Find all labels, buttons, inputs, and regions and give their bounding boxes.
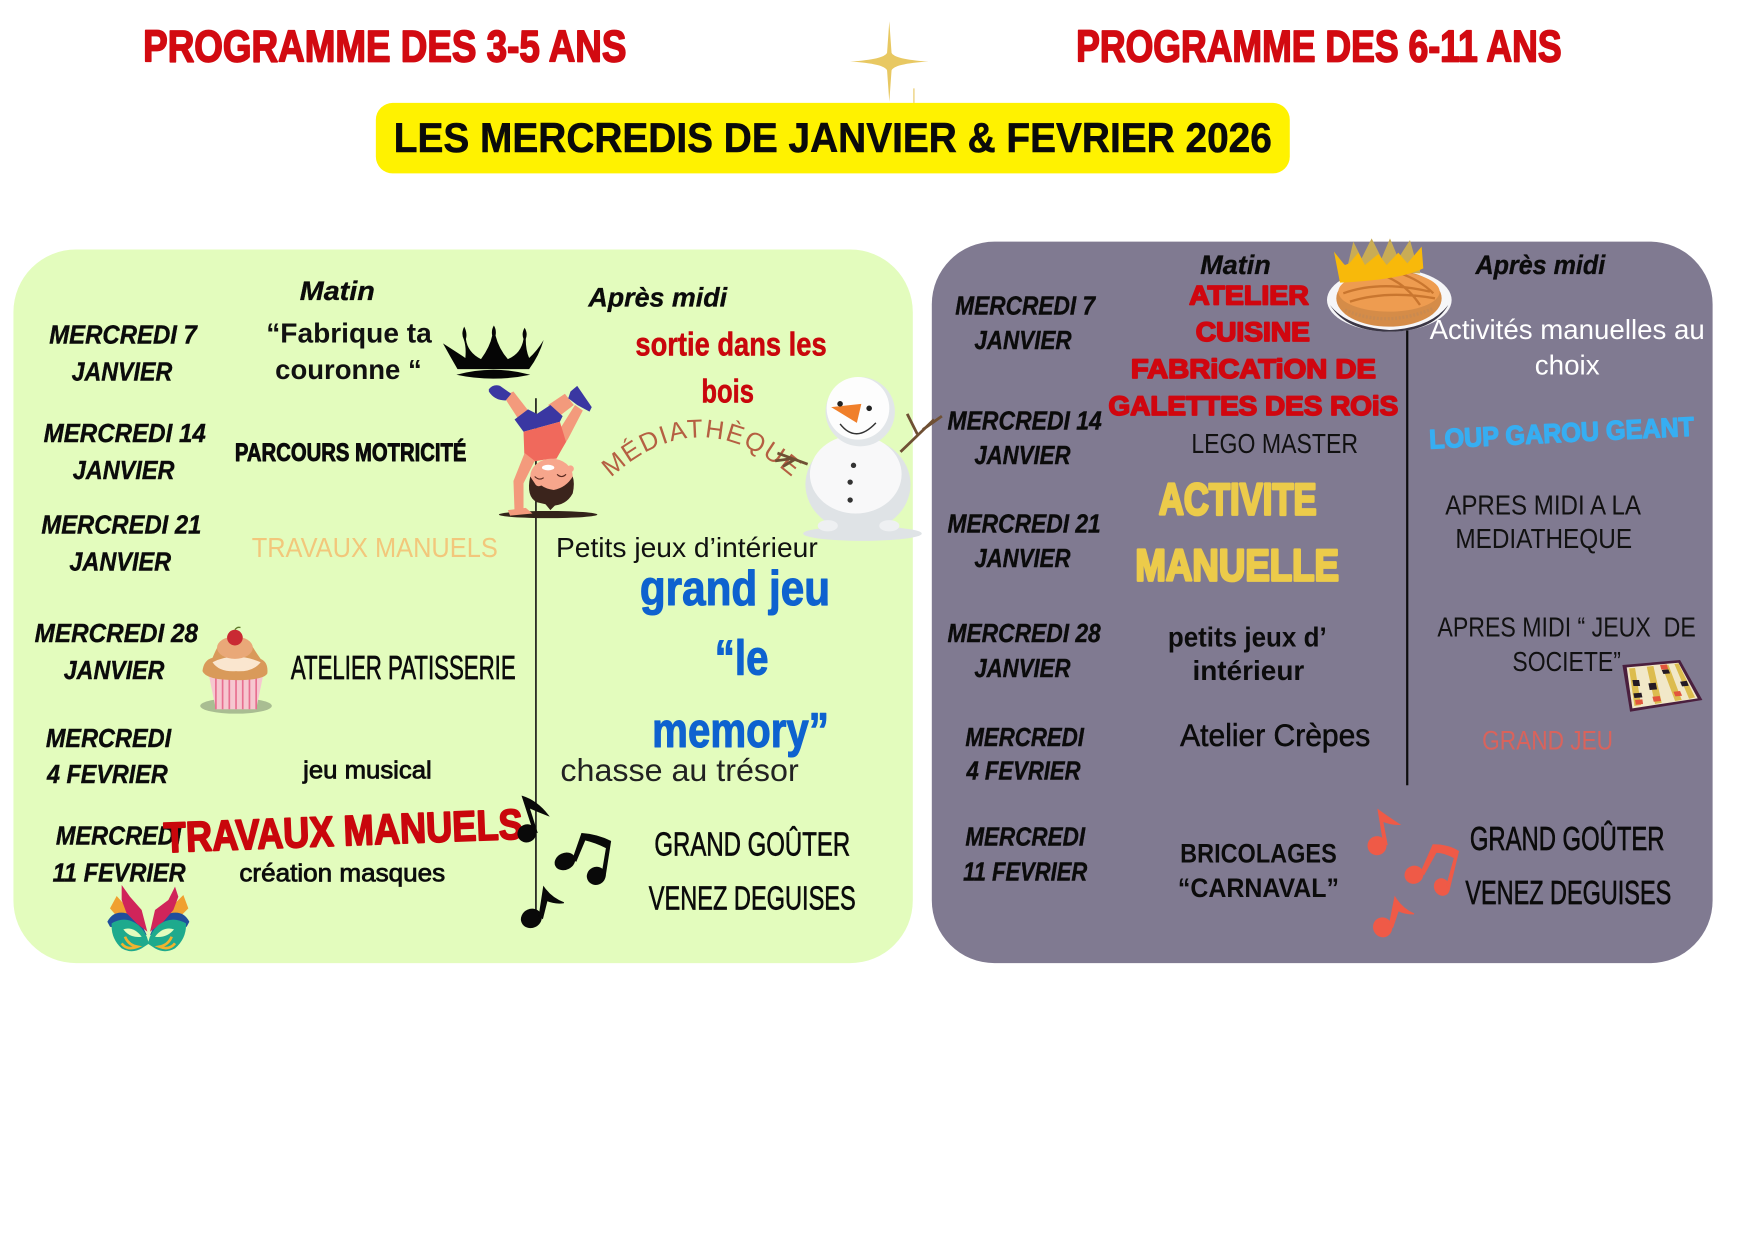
activity: grand jeu le memory: grand jeu bbox=[640, 561, 830, 616]
activity: atelier cuisine: FABRiCATiON DE bbox=[1131, 354, 1376, 384]
divider line left panel bbox=[535, 398, 537, 926]
activity: activités manuelles bbox=[1430, 314, 1705, 381]
date: 14 janvier: MERCREDI 14 bbox=[947, 408, 1102, 436]
date: 28 janvier: JANVIER bbox=[974, 655, 1071, 683]
date: 4 fevrier: MERCREDI bbox=[46, 725, 172, 753]
column heading: Matin: Matin bbox=[300, 276, 375, 306]
title: programme 6-11 ans: PROGRAMME DES 6-11 ANS bbox=[1076, 22, 1562, 72]
icon: gold star bbox=[850, 21, 928, 103]
activity: grand jeu le memory bbox=[640, 561, 830, 758]
activity: fabrique ta couronne: couronne “ bbox=[275, 354, 422, 385]
activity: grand jeu le memory: memory” bbox=[652, 703, 829, 758]
date: 28 janvier: JANVIER bbox=[64, 657, 165, 685]
activity: travaux manuels orange: TRAVAUX MANUELS bbox=[252, 532, 498, 563]
date: 14 janvier bbox=[44, 420, 206, 485]
heading text: LES MERCREDIS DE JANVIER & FEVRIER 2026 bbox=[394, 115, 1272, 161]
date: 28 janvier: MERCREDI 28 bbox=[947, 620, 1101, 648]
date: 7 janvier: MERCREDI 7 bbox=[955, 292, 1097, 320]
icon: snowman bbox=[775, 377, 942, 541]
activity: jeux de societe: SOCIETE” bbox=[1512, 646, 1621, 677]
icon: black crown bbox=[443, 326, 544, 379]
activity: grand goûter: GRAND GOÛTER bbox=[654, 826, 850, 864]
icon: carnival mask bbox=[107, 885, 189, 951]
activity: sortie dans les bois: sortie dans les bbox=[635, 327, 827, 364]
activity: atelier cuisine: GALETTES DES ROiS bbox=[1109, 391, 1398, 421]
date: 14 janvier: MERCREDI 14 bbox=[44, 420, 206, 448]
date: 21 janvier bbox=[947, 510, 1101, 573]
date: 21 janvier: JANVIER bbox=[974, 545, 1071, 573]
activity: atelier cuisine bbox=[1109, 280, 1398, 421]
activity: grand goûter: VENEZ DEGUISES bbox=[649, 880, 856, 917]
activity: atelier cuisine: CUISINE bbox=[1196, 317, 1310, 347]
activity: activite manuelle bbox=[1135, 475, 1339, 591]
date: 7 janvier bbox=[955, 292, 1097, 355]
activity: sortie dans les bois: bois bbox=[701, 374, 754, 411]
date: 4 fevrier: 4 FEVRIER bbox=[966, 758, 1081, 786]
activity: activités manuelles: Activités manuelles au bbox=[1430, 314, 1705, 345]
date: 7 janvier: JANVIER bbox=[72, 358, 173, 386]
panel: programme 3-5 ans bbox=[13, 250, 943, 964]
activity: apres midi mediatheque bbox=[1445, 490, 1641, 554]
activity: fabrique ta couronne bbox=[266, 317, 432, 385]
date: 4 fevrier: MERCREDI bbox=[965, 724, 1085, 752]
date: 7 janvier bbox=[49, 321, 198, 386]
activity: jeux de societe bbox=[1437, 611, 1696, 677]
activity: lego master: LEGO MASTER bbox=[1191, 428, 1358, 459]
date: 14 janvier bbox=[947, 408, 1102, 470]
panel: programme 6-11 ans bbox=[932, 238, 1713, 963]
icon: black music notes bbox=[515, 796, 611, 931]
date: 21 janvier: MERCREDI 21 bbox=[947, 510, 1101, 538]
icon: board game bbox=[1622, 660, 1702, 712]
activity: fabrique ta couronne: “Fabrique ta bbox=[266, 317, 432, 348]
activity: petits jeux d'intérieur bbox=[1168, 622, 1327, 686]
activity: petits jeux d'intérieur: intérieur bbox=[1192, 655, 1304, 686]
icon: child doing handstand bbox=[489, 385, 597, 518]
activity: activite manuelle: MANUELLE bbox=[1135, 541, 1339, 591]
date: 11 fevrier: 11 FEVRIER bbox=[963, 858, 1088, 886]
column heading: Après midi: Après midi bbox=[587, 283, 728, 313]
date: 11 fevrier: MERCREDI bbox=[56, 823, 182, 851]
activity: jeux de societe: APRES MIDI “ JEUX DE bbox=[1437, 611, 1696, 642]
divider line right panel bbox=[1406, 327, 1408, 785]
activity: grand goûter bbox=[1465, 820, 1671, 912]
activity: grand goûter: VENEZ DEGUISES bbox=[1465, 875, 1671, 912]
activity: parcours motricité: PARCOURS MOTRICITÉ bbox=[235, 439, 466, 467]
date: 28 janvier bbox=[947, 620, 1101, 683]
column heading: Matin: Matin bbox=[1200, 250, 1271, 280]
activity: chasse au trésor: chasse au trésor bbox=[560, 753, 799, 788]
date: 21 janvier: MERCREDI 21 bbox=[41, 512, 201, 540]
activity: grand jeu: GRAND JEU bbox=[1482, 725, 1613, 755]
date: 11 fevrier: 11 FEVRIER bbox=[53, 859, 186, 887]
activity: travaux manuels red: TRAVAUX MANUELS bbox=[163, 802, 524, 862]
heading banner bbox=[376, 103, 1290, 173]
date: 28 janvier: MERCREDI 28 bbox=[35, 620, 199, 648]
activity: apres midi mediatheque: MEDIATHEQUE bbox=[1455, 523, 1632, 554]
activity: activités manuelles: choix bbox=[1535, 350, 1600, 381]
date: 11 fevrier bbox=[963, 824, 1088, 886]
activity: petits jeux d'intérieur: petits jeux d’ bbox=[1168, 622, 1327, 653]
activity: jeu musical: jeu musical bbox=[302, 758, 432, 785]
activity: bricolages carnaval bbox=[1178, 838, 1339, 903]
icon: red music notes bbox=[1365, 810, 1459, 940]
activity: atelier cuisine: ATELIER bbox=[1189, 280, 1309, 310]
column heading: Après midi: Après midi bbox=[1475, 250, 1606, 280]
date: 7 janvier: JANVIER bbox=[974, 327, 1072, 355]
date: 4 fevrier bbox=[46, 725, 172, 789]
icon: galette des rois bbox=[1327, 238, 1452, 332]
activity: petits jeux d'intérieur: Petits jeux d’intérieur bbox=[556, 532, 818, 563]
activity: bricolages carnaval: “CARNAVAL” bbox=[1178, 873, 1339, 903]
activity: création masques: création masques bbox=[239, 860, 445, 887]
activity: grand jeu le memory: “le bbox=[715, 631, 768, 686]
activity: atelier crèpes: Atelier Crèpes bbox=[1180, 718, 1370, 753]
icon: cupcake bbox=[200, 627, 272, 714]
date: 21 janvier bbox=[41, 512, 201, 576]
activity: grand goûter: GRAND GOÛTER bbox=[1470, 820, 1665, 858]
title: programme 3-5 ans: PROGRAMME DES 3-5 ANS bbox=[143, 22, 626, 72]
activity: bricolages carnaval: BRICOLAGES bbox=[1180, 838, 1337, 868]
activity: loup garou geant: LOUP GAROU GEANT bbox=[1428, 412, 1695, 455]
activity: atelier patisserie: ATELIER PATISSERIE bbox=[291, 650, 516, 687]
activity: grand goûter bbox=[649, 826, 856, 917]
date: 11 fevrier bbox=[53, 823, 186, 887]
date: 11 fevrier: MERCREDI bbox=[965, 824, 1086, 852]
date: 28 janvier bbox=[35, 620, 199, 685]
date: 4 fevrier bbox=[965, 724, 1085, 786]
activity: apres midi mediatheque: APRES MIDI A LA bbox=[1445, 490, 1641, 521]
date: 14 janvier: JANVIER bbox=[73, 457, 175, 485]
date: 21 janvier: JANVIER bbox=[69, 548, 172, 576]
activity: sortie dans les bois bbox=[635, 327, 827, 411]
date: 4 fevrier: 4 FEVRIER bbox=[46, 761, 168, 789]
activity: médiathèque arc text: MÉDIATHÈQUE bbox=[601, 420, 801, 476]
date: 14 janvier: JANVIER bbox=[974, 442, 1071, 470]
date: 7 janvier: MERCREDI 7 bbox=[49, 321, 198, 349]
activity: activite manuelle: ACTIVITE bbox=[1159, 475, 1317, 525]
